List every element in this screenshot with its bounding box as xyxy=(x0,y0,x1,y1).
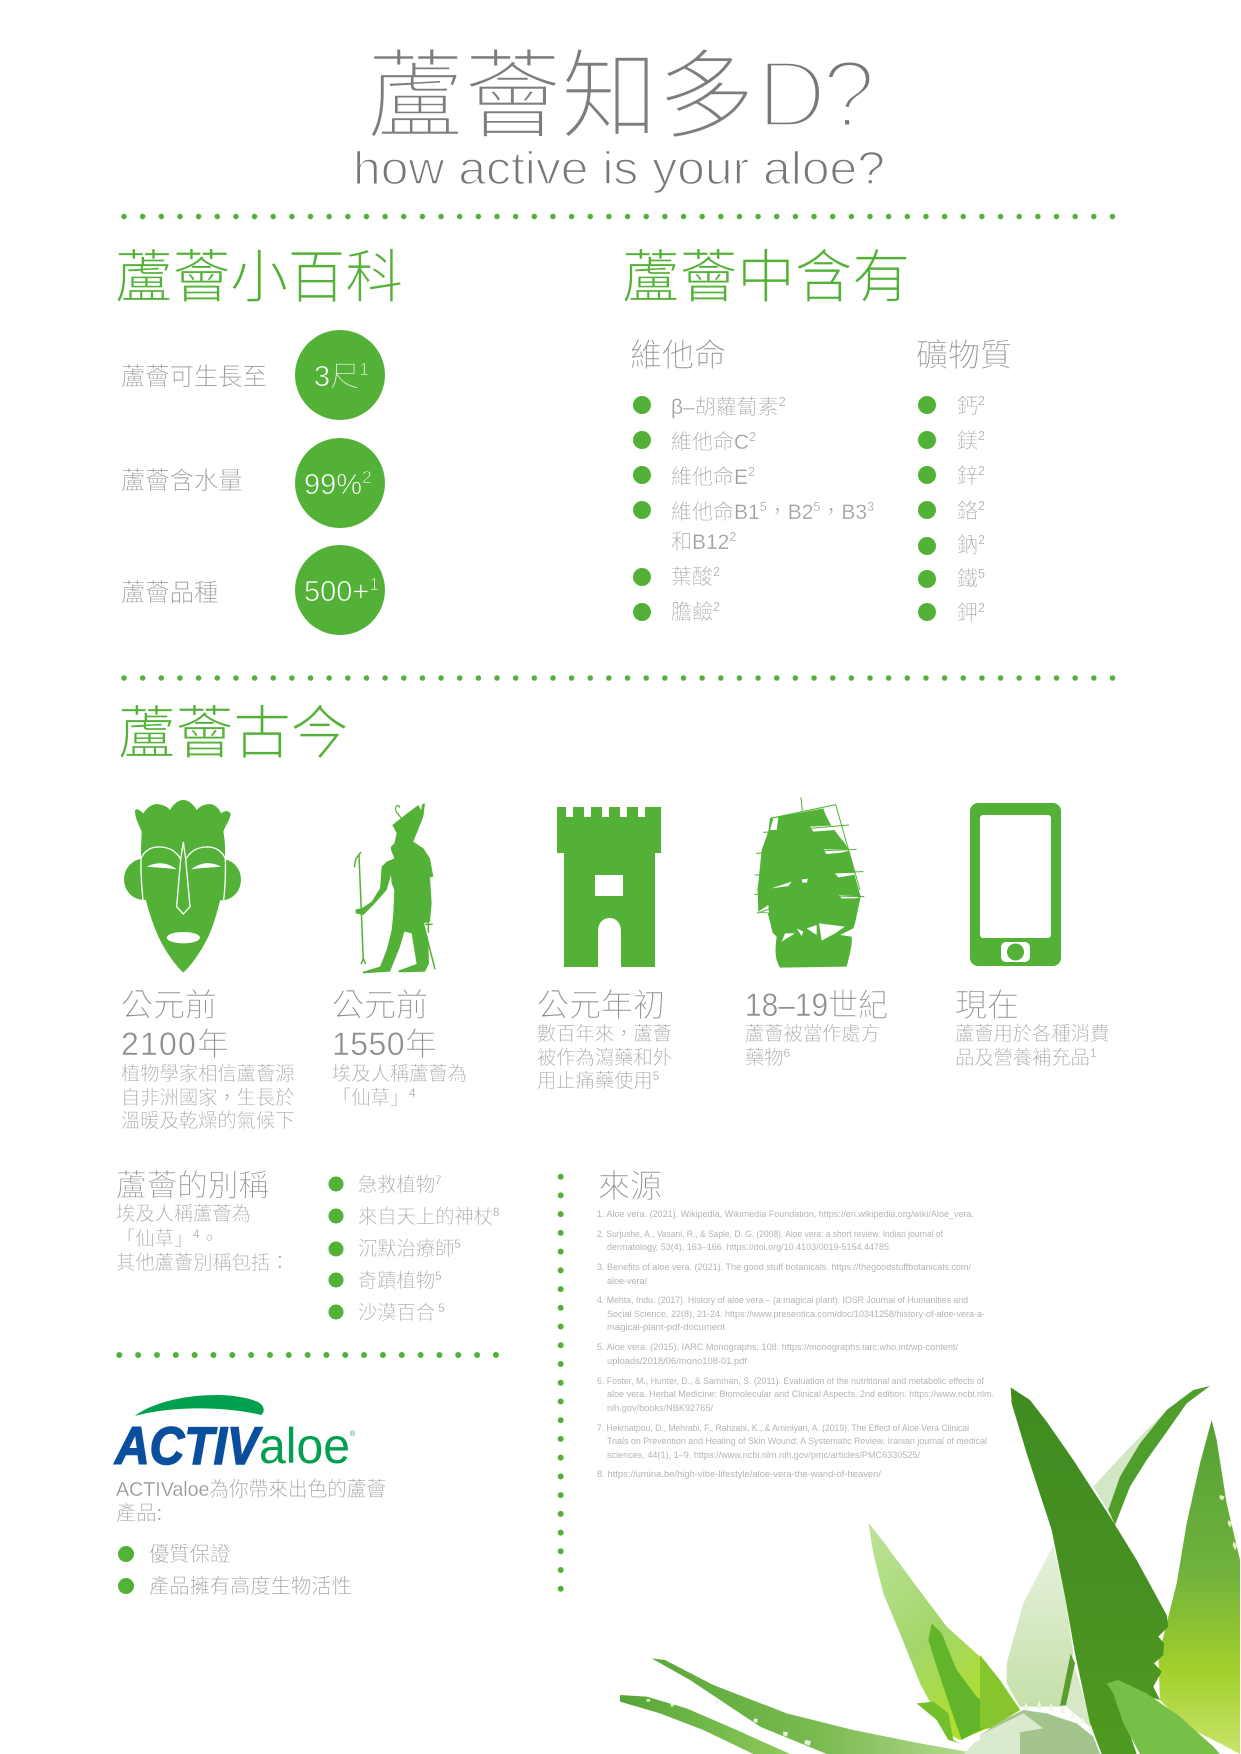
vitamins list: 2 xyxy=(713,600,720,614)
list: other names: 5 xyxy=(435,1303,445,1315)
timeline: present: 現在 xyxy=(955,987,1019,1023)
minerals list: 5 xyxy=(978,567,985,581)
vitamins list: 2 xyxy=(713,565,720,579)
timeline: present xyxy=(955,987,1109,1069)
heading: aloe contains: 蘆薈中含有 xyxy=(622,246,910,310)
logo: ACTIValoe: ACTIV xyxy=(113,1417,263,1476)
minerals list: 2 xyxy=(978,499,985,513)
lower right leaf xyxy=(1107,1680,1220,1754)
right cluster xyxy=(980,1386,1240,1754)
panel: aloe facts xyxy=(121,330,385,635)
description: 蘆薈被當作處方 xyxy=(745,1023,880,1045)
text: references: dermatology, 53(4), 163–166. https://doi.org/10.4103/0019-5154.44785 xyxy=(607,1242,889,1253)
fact: species: 1 xyxy=(369,574,379,594)
text: other names intro: 埃及人稱蘆薈為 xyxy=(116,1203,251,1225)
timeline: early AD: 公元年初 xyxy=(537,987,665,1023)
text: other names intro xyxy=(116,1203,290,1274)
subheading: vitamins: 維他命 xyxy=(630,337,726,373)
list: other names xyxy=(328,1174,499,1324)
minerals list: 2 xyxy=(978,533,985,547)
text: references: 1. Aloe vera. (2021). Wikipedia, Wikimedia Foundation, https://en.wikipedia.org/wiki/Aloe_vera. xyxy=(597,1209,974,1220)
fact: species xyxy=(121,545,385,635)
icon: castle tower xyxy=(557,807,661,967)
logo: ACTIValoe xyxy=(113,1395,356,1476)
vitamins list: ，B2 xyxy=(767,501,813,524)
text: references xyxy=(597,1209,994,1480)
text: references: sciences, 44(1), 1–9. https://www.ncbi.nlm.nih.gov/pmc/articles/PMC6330525/ xyxy=(607,1450,920,1461)
text: other names intro: 「仙草」 xyxy=(116,1229,193,1250)
vitamins list: 5 xyxy=(813,500,820,514)
vitamins list: 2 xyxy=(729,530,736,544)
icon: smartphone xyxy=(970,803,1061,966)
icon: egyptian figure xyxy=(354,803,435,973)
timeline: 2100 BC: 2100年 xyxy=(121,1026,229,1062)
fact: water: 2 xyxy=(362,467,372,487)
list: other names: 奇蹟植物 xyxy=(358,1271,435,1292)
vitamins list: 2 xyxy=(748,465,755,479)
timeline: 18-19th century xyxy=(745,987,888,1069)
left bright leaf edge xyxy=(980,1655,1020,1728)
text: ACTIValoe description: 產品: xyxy=(116,1502,162,1525)
minerals list: 鐵 xyxy=(957,568,978,591)
description xyxy=(332,1063,467,1109)
vitamins list xyxy=(633,395,874,624)
vitamins list: 2 xyxy=(779,395,786,409)
list: other names: 沙漠百合 xyxy=(358,1303,435,1324)
fact: species: 蘆薈品種 xyxy=(121,580,218,607)
subtitle: how active is your aloe? xyxy=(353,142,885,194)
text: references: uploads/2018/06/mono108-01.pdf xyxy=(607,1356,747,1367)
fact: water xyxy=(121,438,385,528)
text: references: Social Science, 22(8), 21-24. https://www.presentica.com/doc/10341258/history-of-aloe-vera-a- xyxy=(607,1309,985,1320)
timeline: 2100 BC: 公元前 xyxy=(121,987,217,1023)
description: 用止痛藥使用 xyxy=(537,1071,653,1092)
fact: height: 1 xyxy=(359,359,369,379)
title: 蘆薈知多 xyxy=(367,42,755,151)
list: other names: 急救植物 xyxy=(358,1175,435,1196)
lower-left leaves xyxy=(620,1523,1019,1754)
timeline: 1550 BC: 1550年 xyxy=(332,1026,437,1062)
minerals list: 鋅 xyxy=(957,465,978,488)
description: 埃及人稱蘆薈為 xyxy=(332,1063,467,1085)
title: ? xyxy=(822,41,875,148)
fact: height: 蘆薈可生長至 xyxy=(121,364,267,391)
right bright leaf xyxy=(1158,1420,1240,1754)
description: 品及營養補充品 xyxy=(955,1048,1090,1069)
minerals list: 2 xyxy=(978,601,985,615)
timeline: 1550 BC: 公元前 xyxy=(332,987,428,1023)
fact: water: 99% xyxy=(304,469,362,501)
center leaf xyxy=(868,1523,1019,1740)
list: other names: 5 xyxy=(454,1239,461,1251)
minerals list: 鉀 xyxy=(957,602,978,625)
vitamins list: 2 xyxy=(749,430,756,444)
timeline: 2100 BC xyxy=(121,987,295,1132)
text: references: 7. Hekmatpou, D., Mehrabi, F., Rahzani, K., & Aminiyan, A. (2019). The Effect of Aloe Vera Clinical xyxy=(597,1423,969,1434)
minerals list: 2 xyxy=(978,394,985,408)
text: references: nih.gov/books/NBK92765/ xyxy=(607,1403,713,1414)
icon: sailing ship xyxy=(754,797,864,968)
title: D xyxy=(757,41,826,148)
vitamins list: ，B3 xyxy=(820,501,867,524)
timeline: 18-19th century: 18–19世紀 xyxy=(745,987,888,1023)
text: other names intro: 其他蘆薈別稱包括： xyxy=(116,1252,290,1274)
minerals list: 鈉 xyxy=(957,534,978,557)
list: ACTIValoe benefits: 產品擁有高度生物活性 xyxy=(149,1575,352,1598)
text: references: 4. Mehta, Indu. (2017). History of aloe vera – (a magical plant). IOSR Journal of Humanities and xyxy=(597,1295,968,1306)
minerals list: 2 xyxy=(978,429,985,443)
description: 6 xyxy=(784,1048,790,1060)
timeline: early AD xyxy=(537,987,672,1092)
panel: vitamins xyxy=(630,337,874,624)
fact: water: 蘆薈含水量 xyxy=(121,468,242,495)
text: references: 8. https://umina.be/high-vibe-lifestyle/aloe-vera-the-wand-of-heaven/ xyxy=(597,1469,881,1480)
text: other names intro: 4 xyxy=(193,1229,200,1241)
list: other names: 來自天上的神杖 xyxy=(358,1207,493,1228)
description: 藥物 xyxy=(745,1048,784,1069)
list: other names: 5 xyxy=(435,1271,442,1283)
description: 植物學家相信蘆薈源 xyxy=(121,1063,295,1085)
text: references: aloe-vera/ xyxy=(607,1276,647,1287)
description: 蘆薈用於各種消費 xyxy=(955,1023,1109,1045)
text: references: magical-plant-pdf-document xyxy=(607,1322,725,1333)
logo: ACTIValoe: ® xyxy=(350,1430,356,1438)
description xyxy=(121,1063,295,1132)
description xyxy=(745,1023,880,1069)
text: references: 5. Aloe vera. (2015). IARC Monographs, 108. https://monographs.iarc.who.int/wp-content/ xyxy=(597,1342,958,1353)
list: other names: 7 xyxy=(435,1175,442,1187)
fact: species: 500+ xyxy=(304,576,369,608)
vitamins list: 3 xyxy=(867,500,874,514)
description xyxy=(537,1023,672,1092)
panel: minerals xyxy=(916,337,1012,625)
text: references: Trials on Prevention and Healing of Skin Wound: A Systematic Review. Iranian journal of medical xyxy=(607,1436,987,1447)
vitamins list: 葉酸 xyxy=(671,566,713,589)
text: references: 6. Foster, M., Hunter, D., & Samman, S. (2011). Evaluation of the nutritional and metabolic effects of xyxy=(597,1376,984,1387)
logo: ACTIValoe: aloe xyxy=(259,1418,350,1474)
description: 自非洲國家，生長於 xyxy=(121,1087,295,1109)
vitamins list: 和B12 xyxy=(671,531,729,554)
text: ACTIValoe description: ACTIValoe為你帶來出色的蘆薈 xyxy=(116,1478,386,1501)
vitamins list: 膽鹼 xyxy=(671,601,713,624)
description xyxy=(955,1023,1109,1069)
list: ACTIValoe benefits xyxy=(118,1543,352,1598)
back pale leaf xyxy=(1007,1545,1073,1707)
text: references: 3. Benefits of aloe vera. (2021). The good stuff botanicals. https://thegoodstuffbotanicals.com/ xyxy=(597,1262,971,1273)
vitamins list: β–胡蘿蔔素 xyxy=(671,396,779,419)
text: other names intro: 。 xyxy=(200,1229,219,1250)
heading: aloe past and present: 蘆薈古今 xyxy=(118,702,348,766)
minerals list xyxy=(918,394,985,625)
heading: aloe encyclopedia: 蘆薈小百科 xyxy=(115,246,403,310)
description: 4 xyxy=(409,1088,416,1100)
icon: tribal mask xyxy=(124,800,241,973)
rosette base xyxy=(980,1710,1100,1754)
vitamins list: 5 xyxy=(760,500,767,514)
text: ACTIValoe description xyxy=(116,1478,386,1525)
subheading: minerals: 礦物質 xyxy=(916,337,1012,373)
heading: sources: 來源 xyxy=(598,1168,662,1204)
list: ACTIValoe benefits: 優質保證 xyxy=(149,1543,230,1566)
back upper-right leaf xyxy=(1108,1386,1210,1525)
list: other names: 8 xyxy=(493,1207,499,1219)
minerals list: 2 xyxy=(978,464,985,478)
description: 1 xyxy=(1090,1048,1096,1060)
heading: other names: 蘆薈的別稱 xyxy=(116,1169,269,1203)
description: 「仙草」 xyxy=(332,1088,409,1109)
minerals list: 鈣 xyxy=(957,395,978,418)
text: references: aloe vera. Herbal Medicine: Biomolecular and Clinical Aspects. 2nd edition. https://www.ncbi.nlm. xyxy=(607,1389,994,1400)
description: 5 xyxy=(653,1071,659,1083)
description: 溫暖及乾燥的氣候下 xyxy=(121,1110,295,1132)
vitamins list: 維他命B1 xyxy=(671,501,760,524)
big front leaf xyxy=(1011,1387,1168,1754)
list: other names: 沉默治療師 xyxy=(358,1239,454,1260)
fact: height: 3尺 xyxy=(314,361,359,393)
timeline: 1550 BC xyxy=(332,987,467,1109)
fact: height xyxy=(121,330,385,420)
vitamins list: 維他命C xyxy=(671,431,749,454)
minerals list: 鉻 xyxy=(957,500,978,523)
illustration: aloe plant xyxy=(620,1386,1240,1754)
rosette lower-left patch xyxy=(964,1722,1020,1754)
minerals list: 鎂 xyxy=(957,430,978,453)
description: 數百年來，蘆薈 xyxy=(537,1023,672,1045)
text: references: 2. Surjushe, A., Vasani, R., & Saple, D. G. (2008). Aloe vera: a short review. Indian journal of xyxy=(597,1229,943,1240)
vitamins list: 維他命E xyxy=(671,466,748,489)
description: 被作為瀉藥和外 xyxy=(537,1047,672,1069)
